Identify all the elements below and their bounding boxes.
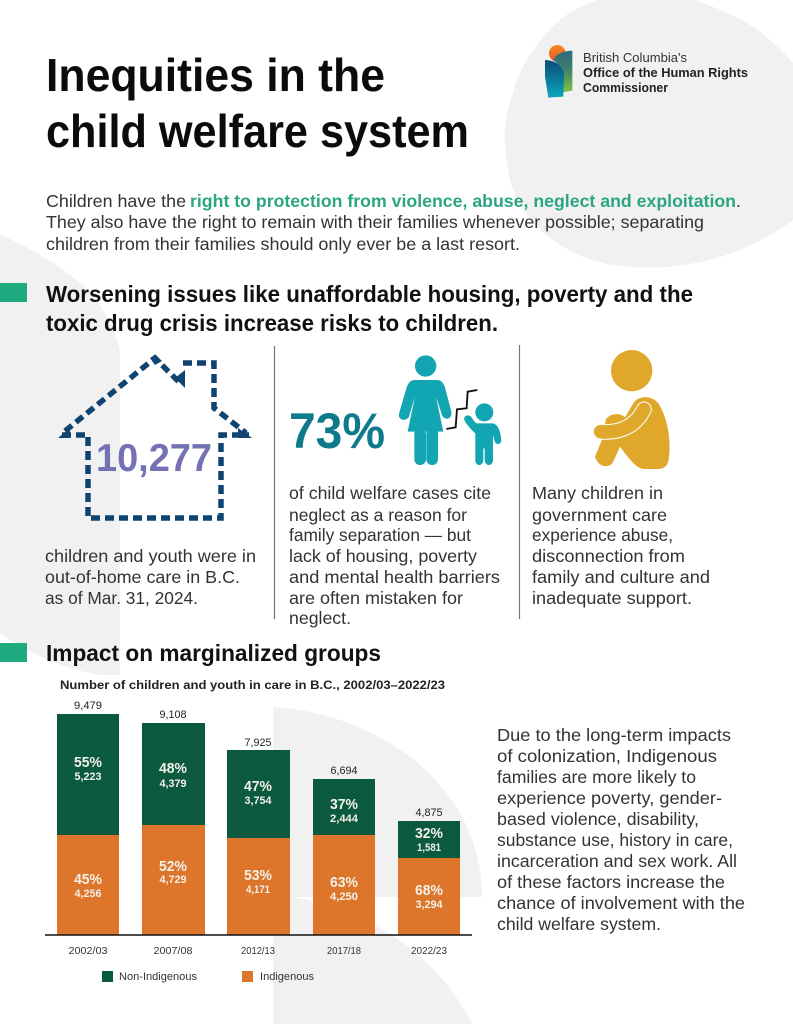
text block: long-term impacts of colonization: substance use, history in care, [497, 830, 733, 850]
bar: 2002/03: 45% [74, 871, 102, 888]
caption: children in care: children and youth were in [45, 546, 256, 566]
panel: children in care [45, 355, 256, 608]
bar: 2017/18: 4,250 [330, 891, 358, 903]
caption: neglect: are often mistaken for [289, 588, 463, 608]
caption: neglect [289, 483, 500, 628]
logo: British Columbia's Office of the Human Rights Commissioner: British Columbia's [583, 51, 687, 65]
icon: logo mark [545, 45, 572, 98]
caption: neglect: neglect. [289, 608, 351, 628]
bar: 2012/13: 47% [244, 778, 272, 795]
caption: abuse in care: inadequate support. [532, 588, 692, 608]
bar: 2012/13 [227, 737, 290, 935]
bar: 2007/08: 4,379 [160, 778, 186, 790]
bar: 2022/23: 1,581 [417, 842, 441, 854]
intro paragraph: . [736, 191, 741, 211]
heading: impact on marginalized groups: Impact on marginalized groups [46, 640, 381, 666]
big number: 73%: 73% [289, 403, 385, 459]
bar: 2012/13: 3,754 [244, 795, 272, 807]
text block: long-term impacts of colonization: based violence, disability, [497, 809, 699, 829]
bar: 2022/23 [398, 807, 460, 935]
caption: children in care: as of Mar. 31, 2024. [45, 588, 198, 608]
title: Inequities in the [46, 49, 385, 101]
bar: 2017/18: 63% [330, 874, 358, 891]
icon: mother and child separated [399, 355, 501, 465]
text block: long-term impacts of colonization: of colonization, Indigenous [497, 746, 717, 766]
caption: neglect: family separation — but [289, 525, 471, 545]
x axis labels: 2012/13 [241, 945, 275, 957]
text block: long-term impacts of colonization: families are more likely to [497, 767, 696, 787]
legend: Non-Indigenous [119, 971, 197, 983]
text block: long-term impacts of colonization: of these factors increase the [497, 872, 725, 892]
bar: 2002/03: 55% [74, 754, 102, 771]
panel: abuse in care [532, 350, 710, 608]
caption: abuse in care [532, 483, 710, 608]
intro paragraph: children from their families should only ever be a last resort. [46, 234, 520, 254]
caption: children in care: out-of-home care in B.C. [45, 567, 240, 587]
logo: British Columbia's Office of the Human Rights Commissioner: Office of the Human Rights [583, 66, 748, 80]
section marker: green tab 2 [0, 643, 27, 662]
section marker: green tab [0, 283, 27, 302]
caption: abuse in care: experience abuse, [532, 525, 673, 545]
intro paragraph: right to protection from violence, abuse, neglect and exploitation [190, 191, 736, 211]
x axis labels: 2022/23 [411, 945, 447, 957]
text block: long-term impacts of colonization [497, 725, 745, 934]
intro paragraph: They also have the right to remain with their families whenever possible; separating [46, 212, 704, 232]
x axis labels [68, 945, 447, 957]
logo: British Columbia's Office of the Human Rights Commissioner: Commissioner [583, 81, 668, 95]
x axis labels: 2017/18 [327, 945, 361, 957]
bar: 2012/13: 4,171 [246, 884, 270, 896]
caption: abuse in care: family and culture and [532, 567, 710, 587]
intro paragraph: Children have the [46, 191, 186, 211]
bar: 2007/08: 48% [159, 760, 187, 777]
heading: worsening issues: Worsening issues like unaffordable housing, poverty and the [46, 281, 693, 307]
caption: neglect: lack of housing, poverty [289, 546, 477, 566]
bar: 2022/23: 4,875 [416, 807, 442, 819]
text block: long-term impacts of colonization: Due to the long-term impacts [497, 725, 731, 745]
text block: long-term impacts of colonization: chance of involvement with the [497, 893, 745, 913]
heading: worsening issues [46, 281, 693, 336]
icon: seated child [595, 350, 670, 469]
caption: abuse in care: government care [532, 505, 667, 525]
bar: 2002/03: 4,256 [74, 888, 102, 900]
bar: 2007/08 [142, 709, 205, 935]
bar: 2022/23: 68% [415, 882, 443, 899]
bar: 2002/03 [57, 700, 119, 935]
bar: 2002/03: 9,479 [74, 700, 102, 712]
bar: 2007/08: 52% [159, 858, 187, 875]
bar chart: children in care [45, 700, 472, 957]
caption: abuse in care: disconnection from [532, 546, 685, 566]
bar: 2017/18: 6,694 [330, 765, 358, 777]
intro paragraph [46, 191, 741, 254]
big number: 10,277: 10,277 [96, 437, 212, 480]
x axis labels: 2002/03 [68, 945, 108, 957]
bar: 2002/03: 5,223 [74, 771, 102, 783]
bar: 2007/08: 9,108 [160, 709, 186, 721]
title [46, 49, 469, 157]
text block: long-term impacts of colonization: child welfare system. [497, 914, 661, 934]
panel: 73 percent neglect [289, 355, 501, 628]
legend: Indigenous [260, 971, 314, 983]
bar: 2007/08: 4,729 [160, 874, 186, 886]
icon: dashed house [58, 355, 252, 518]
heading: worsening issues: toxic drug crisis increase risks to children. [46, 310, 498, 336]
bar: 2017/18: 37% [330, 796, 358, 813]
caption: children in care [45, 546, 256, 608]
bar: 2012/13: 7,925 [244, 737, 272, 749]
bar: 2017/18 [313, 765, 375, 935]
bar: 2012/13: 53% [244, 867, 272, 884]
logo: British Columbia's Office of the Human Rights Commissioner [545, 45, 748, 98]
text block: long-term impacts of colonization: experience poverty, gender- [497, 788, 722, 808]
bar: 2022/23: 32% [415, 825, 443, 842]
text block: long-term impacts of colonization: incarceration and sex work. All [497, 851, 737, 871]
chart title: Number of children and youth in care in B.C., 2002/03–2022/23 [60, 678, 445, 692]
caption: neglect: neglect as a reason for [289, 505, 467, 525]
caption: neglect: and mental health barriers [289, 567, 500, 587]
title: child welfare system [46, 105, 469, 157]
bar: 2017/18: 2,444 [330, 813, 359, 825]
caption: neglect: of child welfare cases cite [289, 483, 491, 503]
legend [102, 971, 314, 983]
bar: 2022/23: 3,294 [416, 899, 443, 911]
x axis labels: 2007/08 [154, 945, 193, 957]
caption: abuse in care: Many children in [532, 483, 663, 503]
